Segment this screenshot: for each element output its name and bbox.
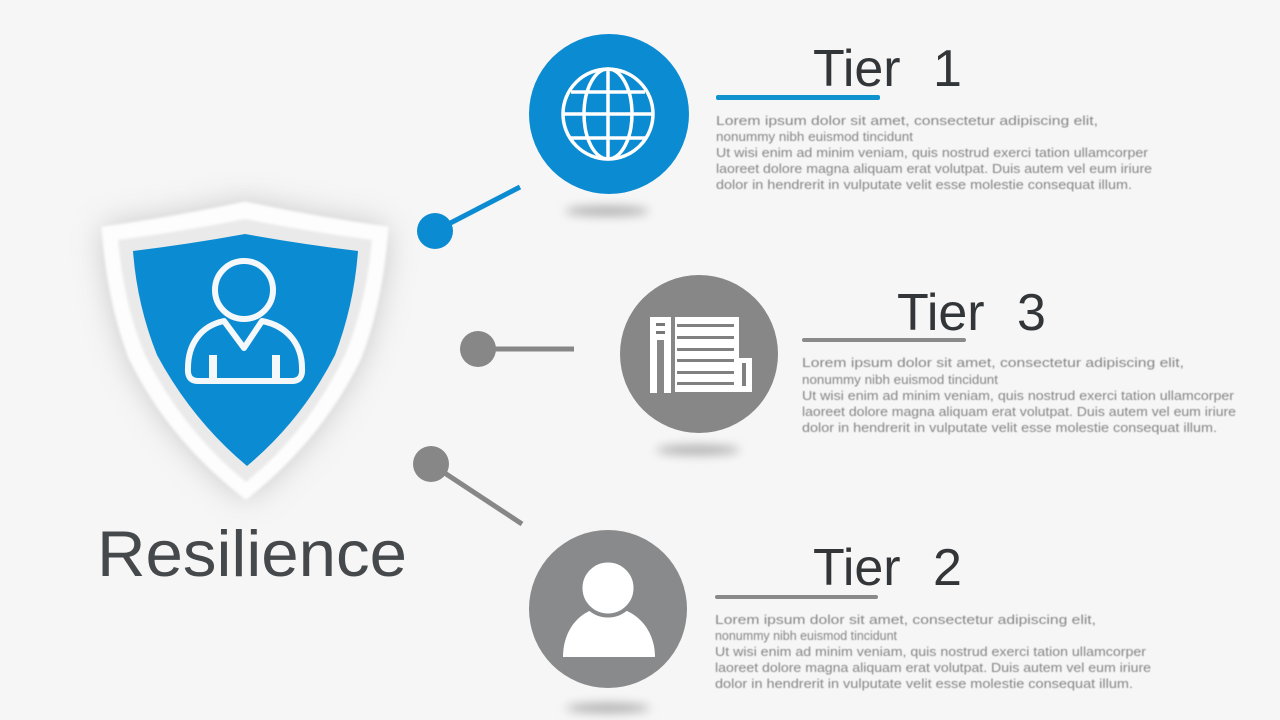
icon: person solid bbox=[563, 560, 655, 657]
icon: globe bbox=[563, 69, 653, 159]
text block: Tier 3: Lorem ipsum dolor sit amet, consectetur adipiscing elit, bbox=[802, 355, 1184, 370]
connector: Tier 3 bbox=[460, 331, 574, 367]
text block: Tier 2 bbox=[715, 612, 1151, 691]
text block: Tier 2: Lorem ipsum dolor sit amet, consectetur adipiscing elit, bbox=[715, 612, 1096, 627]
heading: Tier 2: Tier bbox=[813, 539, 901, 597]
text block: Tier 1: dolor in hendrerit in vulputate velit esse molestie consequat illum. bbox=[716, 177, 1132, 192]
heading: Tier 1: Tier bbox=[813, 40, 901, 98]
text block: Tier 2: Ut wisi enim ad minim veniam, quis nostrud exerci tation ullamcorper bbox=[715, 644, 1147, 659]
text block: Tier 3: nonummy nibh euismod tincidunt bbox=[802, 372, 998, 387]
heading: Tier 1: 1 bbox=[933, 40, 962, 98]
text block: Tier 1: laoreet dolore magna aliquam erat volutpat. Duis autem vel eum iriure bbox=[716, 161, 1152, 176]
text block: Tier 1: nonummy nibh euismod tincidunt bbox=[716, 129, 913, 144]
connector: Tier 2 bbox=[413, 446, 522, 524]
heading: Tier 3: Tier bbox=[897, 284, 985, 342]
text block: Tier 3: Ut wisi enim ad minim veniam, quis nostrud exerci tation ullamcorper bbox=[802, 388, 1235, 403]
title: Resilience: Resilience bbox=[97, 517, 407, 590]
heading: Tier 3: 3 bbox=[1017, 284, 1046, 342]
text block: Tier 1: Ut wisi enim ad minim veniam, quis nostrud exerci tation ullamcorper bbox=[716, 145, 1149, 160]
text block: Tier 3: dolor in hendrerit in vulputate velit esse molestie consequat illum. bbox=[802, 420, 1217, 435]
panel: Tier 3 bbox=[620, 275, 1236, 455]
panel: Tier 1 bbox=[529, 34, 1152, 216]
text block: Tier 2: laoreet dolore magna aliquam erat volutpat. Duis autem vel eum iriure bbox=[715, 660, 1151, 675]
text block: Tier 2: dolor in hendrerit in vulputate velit esse molestie consequat illum. bbox=[715, 676, 1133, 691]
text block: Tier 3 bbox=[802, 355, 1236, 435]
connector: Tier 1 bbox=[417, 187, 520, 249]
icon: person outline bbox=[188, 261, 302, 381]
panel: shield bbox=[103, 203, 387, 498]
text block: Tier 2: nonummy nibh euismod tincidunt bbox=[715, 628, 897, 643]
text block: Tier 3: laoreet dolore magna aliquam erat volutpat. Duis autem vel eum iriure bbox=[802, 404, 1236, 419]
heading: Tier 2: 2 bbox=[933, 539, 962, 597]
panel: Tier 2 bbox=[529, 530, 1151, 713]
text block: Tier 1: Lorem ipsum dolor sit amet, consectetur adipiscing elit, bbox=[716, 113, 1098, 128]
icon: document building bbox=[650, 317, 752, 393]
text block: Tier 1 bbox=[716, 113, 1152, 192]
